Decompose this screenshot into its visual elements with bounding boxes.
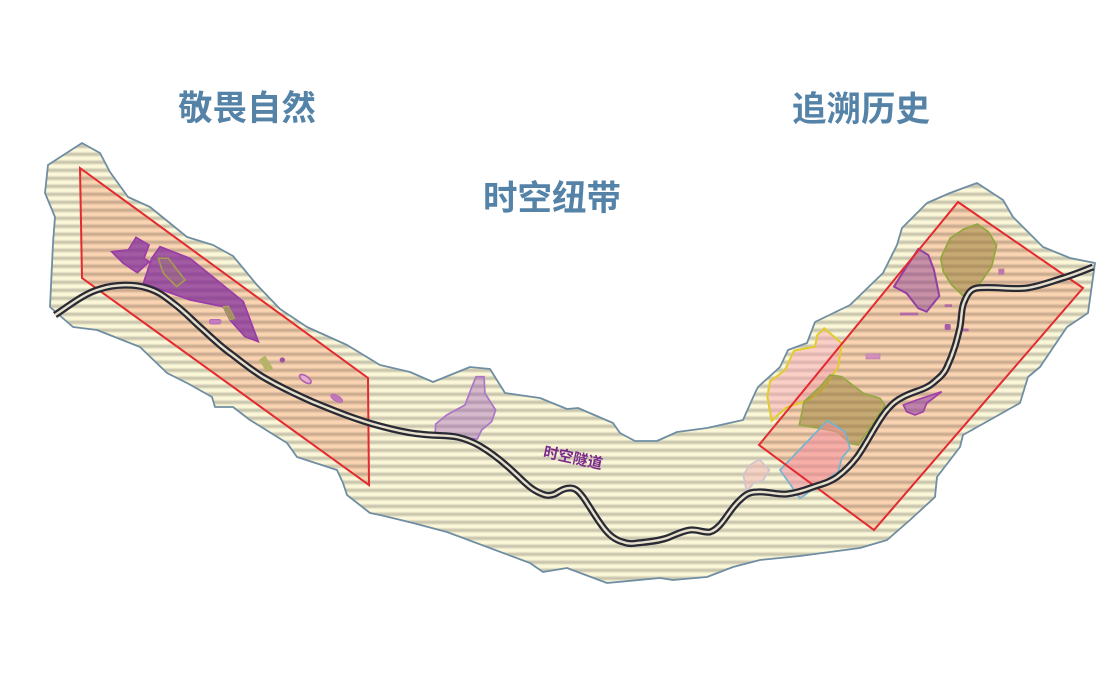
nature zone red border — [80, 168, 369, 485]
olive patch bottom — [799, 375, 885, 445]
heading: trace history: 追溯历史 — [792, 91, 930, 129]
zone: history red rectangle — [759, 202, 1083, 530]
heading: revere nature: 敬畏自然 — [178, 90, 316, 128]
pale pink patch — [743, 459, 769, 492]
striped terrain band — [45, 143, 1095, 583]
purple patch near road — [903, 392, 942, 415]
olive outline inside patch — [158, 258, 185, 287]
label: tunnel: 时空隧道 — [542, 443, 604, 473]
tunnel road — [55, 267, 1093, 544]
purple patch top — [894, 249, 939, 312]
small purple markers — [209, 319, 221, 324]
nature zone landmarks — [112, 237, 344, 404]
zone: nature red parallelogram — [80, 168, 369, 485]
history zone red border — [759, 202, 1083, 530]
blue outlined patch — [780, 421, 850, 498]
yellow outlined patch — [767, 328, 842, 421]
small purple markers — [866, 354, 880, 359]
olive small marker — [223, 306, 235, 320]
purple patch large — [143, 247, 258, 342]
purple patch small — [112, 237, 149, 273]
heading: space-time link: 时空纽带 — [483, 180, 621, 218]
history zone landmarks — [743, 224, 1004, 498]
olive patch top — [941, 224, 997, 296]
middle purple patch — [435, 377, 496, 439]
map: corridor with zones — [45, 143, 1095, 583]
